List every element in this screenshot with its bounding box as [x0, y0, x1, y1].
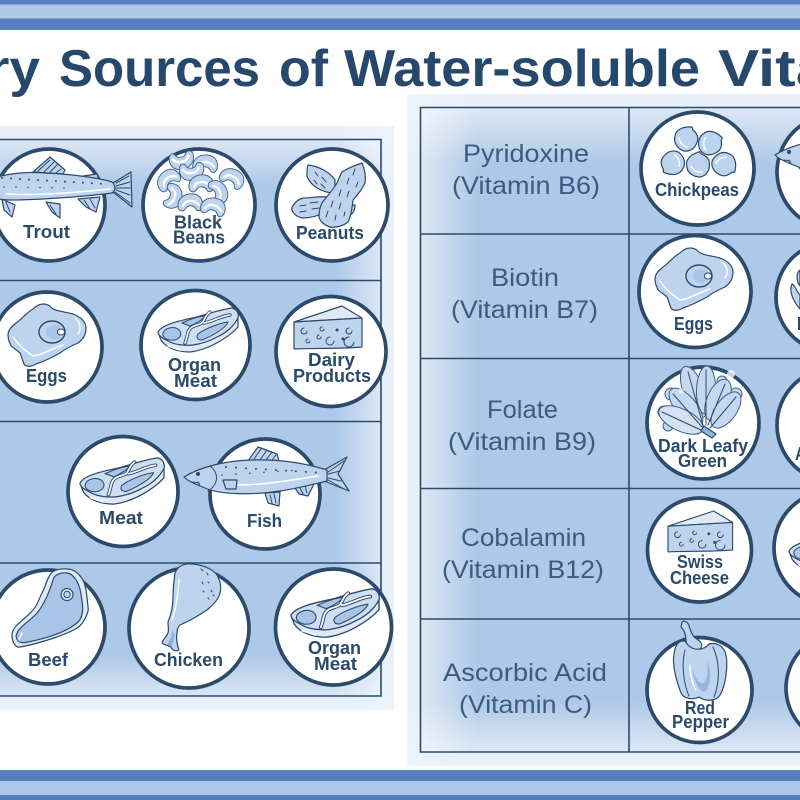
food: Dark Leafy Green: Dark Leafy: [658, 435, 749, 456]
icon: beef steak: [12, 569, 88, 647]
food: Organ Meat (row 2): [141, 290, 250, 400]
icon: meat: [80, 458, 164, 504]
food: Eggs (left): [0, 292, 102, 402]
food: Peanuts: [276, 149, 388, 261]
label: Cobalamin: Cobalamin: [461, 524, 586, 552]
title: Sources: [59, 40, 260, 98]
icon: cropped food: [791, 270, 800, 309]
label: Vitamin C: (Vitamin C): [459, 691, 592, 719]
icon: chicken drumstick: [162, 564, 221, 651]
bottom stripe band: [0, 770, 800, 800]
icon: trout: [0, 157, 132, 218]
label: Ascorbic Acid: Ascorbic Acid: [443, 659, 607, 687]
food: Dairy Products: Dairy: [308, 349, 356, 370]
label: Vitamin B12: (Vitamin B12): [442, 556, 604, 584]
food: Chickpeas: [641, 112, 754, 225]
food: Swiss Cheese: Swiss: [677, 551, 723, 572]
food: Chicken: [129, 564, 249, 688]
food: Organ Meat (row 4): Organ: [308, 637, 361, 658]
food: Organ Meat (cropped): [774, 491, 800, 605]
food: Black Beans: [143, 149, 255, 261]
food: Organ Meat (row 2): Meat: [174, 370, 217, 391]
icon: peanuts: [292, 163, 365, 227]
food: Dairy Products: [276, 296, 386, 406]
icon: organ meat: [291, 589, 379, 637]
icon: organ meat: [789, 527, 800, 571]
icon: cheese: [294, 306, 362, 349]
food: Swiss Cheese: [648, 498, 752, 602]
label: Pyridoxine: Pyridoxine: [463, 140, 589, 168]
food: Fish: [184, 439, 349, 549]
icon: red pepper: [673, 621, 727, 700]
label: Vitamin B9: (Vitamin B9): [448, 428, 596, 456]
food: Asparagus (cropped): [777, 368, 800, 482]
title: Water-soluble: [344, 40, 700, 98]
label: Vitamin B6: (Vitamin B6): [452, 172, 600, 200]
food: Eggs (right): [639, 236, 751, 348]
icon: swiss cheese: [668, 511, 733, 552]
food: Eggs (right): Eggs: [674, 313, 713, 334]
food: Black Beans: Beans: [173, 226, 225, 248]
food: Organ Meat (row 4): Meat: [314, 653, 357, 674]
panel: left table: [0, 126, 394, 710]
icon: fish: [775, 125, 800, 184]
icon: fish: [184, 447, 349, 506]
panel: right table: [407, 94, 800, 766]
vitamin labels: [442, 140, 607, 719]
label: Vitamin B7: (Vitamin B7): [451, 296, 598, 324]
food: Fish (right, cropped): [775, 115, 800, 229]
food: Dark Leafy Green: [647, 363, 759, 479]
label: Biotin: Biotin: [491, 264, 559, 292]
icon: egg: [8, 304, 86, 366]
label: Folate: Folate: [487, 396, 558, 424]
food: Fish: Fish: [247, 510, 282, 531]
food: Organ Meat (row 2): Organ: [168, 354, 221, 375]
food: Peanuts: Peanuts: [296, 222, 364, 243]
food: Beef: [0, 569, 105, 684]
icon: organ meat: [158, 308, 238, 352]
food: Red Pepper: [647, 621, 752, 742]
food: Chicken: Chicken: [154, 649, 223, 670]
food: Organ Meat (row 4): [276, 569, 392, 685]
icon: leafy greens: [655, 363, 747, 440]
food: Dairy Products: Products: [293, 365, 371, 386]
food: Red Pepper: Red: [685, 697, 715, 718]
food: Swiss Cheese: Cheese: [670, 567, 729, 588]
food: Liver (cropped): [776, 242, 800, 352]
top stripe band: [0, 0, 800, 30]
icon: black beans: [153, 150, 247, 218]
food: Eggs (left): Eggs: [26, 365, 67, 386]
food: Trout: [0, 149, 132, 261]
food: Dark Leafy Green: Green: [678, 450, 727, 471]
food: Trout: Trout: [23, 221, 70, 242]
title: of: [279, 40, 329, 98]
food: Beef: Beef: [28, 649, 69, 670]
food: Red Pepper: Pepper: [672, 711, 729, 732]
food: Meat: [68, 436, 178, 546]
food: Chickpeas: Chickpeas: [655, 179, 739, 200]
food: cropped circle (row 5): [786, 633, 800, 743]
icon: egg: [655, 248, 733, 310]
food: Black Beans: Black: [174, 212, 223, 232]
icon: chickpeas: [658, 126, 738, 180]
food: Meat: Meat: [99, 507, 143, 528]
